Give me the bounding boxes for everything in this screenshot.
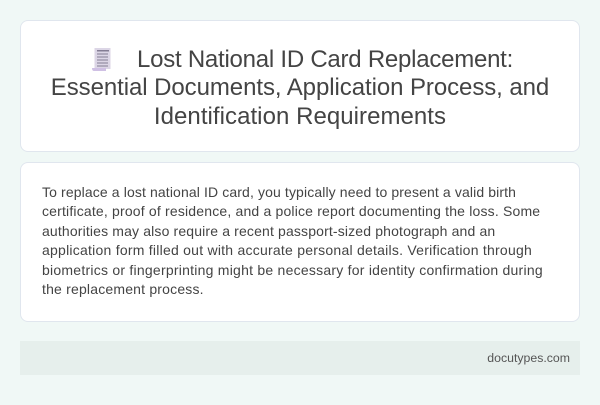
panel: description card (20, 162, 580, 322)
panel: title card (20, 20, 580, 152)
title: Identification Requirements (154, 103, 446, 130)
text block: description: To replace a lost national ID card, you typically need to present a valid birth (42, 184, 516, 200)
text block: description: application form filled out with accurate personal details. Verification through (42, 242, 532, 258)
text block: description: the replacement process. (42, 281, 204, 297)
text block: description: certificate, proof of residence, and a police report documenting the loss. Some (42, 203, 540, 219)
text block: description: biometrics or fingerprinting might be necessary for identity confirmation during (42, 262, 543, 278)
icon: document scroll (92, 48, 110, 71)
text block: description (42, 184, 543, 297)
title: Lost National ID Card Replacement: (137, 46, 513, 73)
footer bar (20, 341, 580, 375)
text block: description: authorities may also require a recent passport-sized photograph and an (42, 223, 495, 239)
footer source text: docutypes.com (487, 351, 570, 365)
title (51, 46, 549, 130)
title: Essential Documents, Application Process, and (51, 74, 549, 101)
